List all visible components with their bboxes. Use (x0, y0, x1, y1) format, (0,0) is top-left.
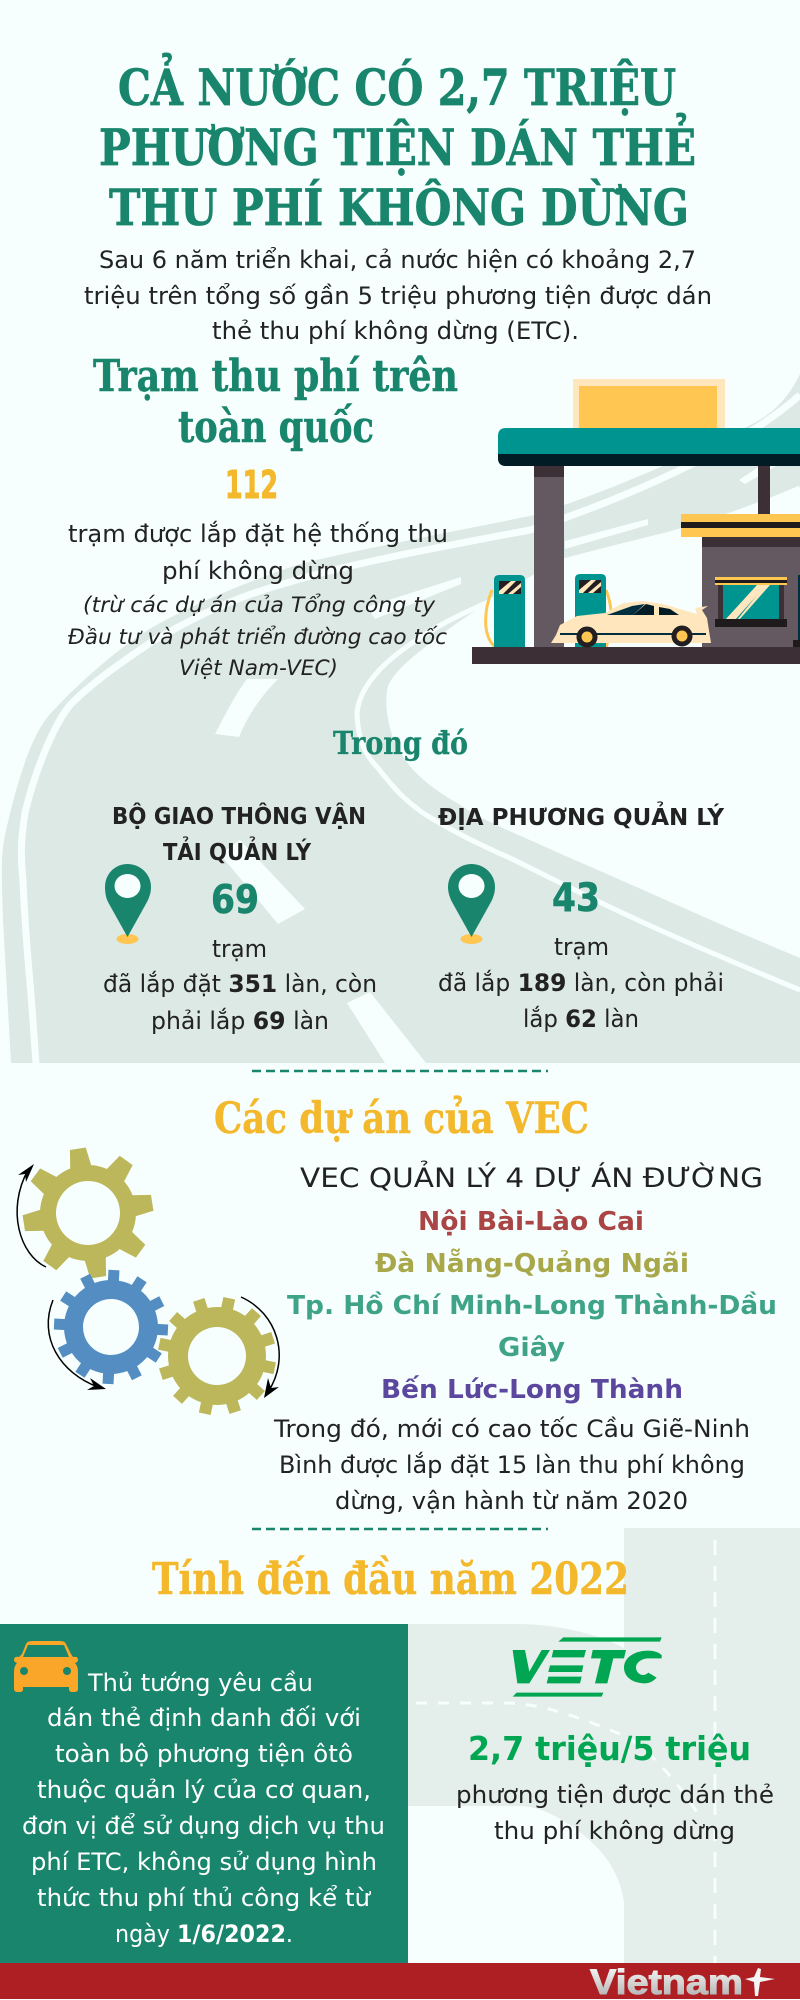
project list: Nội Bài-Lào Cai (418, 1207, 644, 1237)
heading: as of early 2022: Tính đến đầu năm 2022 (152, 1554, 629, 1605)
column heading: ĐỊA PHƯƠNG QUẢN LÝ (438, 801, 724, 831)
column: local management (438, 801, 724, 1033)
arrow: top gear (17, 1164, 46, 1267)
intro text: thẻ thu phí không dừng (ETC). (212, 317, 579, 345)
column details: trạm (554, 933, 609, 961)
illustration: toll station with car (472, 379, 800, 664)
title: THU PHÍ KHÔNG DỪNG (109, 178, 689, 237)
number: 112 stations: 112 (225, 463, 278, 507)
number: 69: 69 (211, 878, 259, 923)
title: PHƯƠNG TIỆN DÁN THẺ (99, 112, 696, 177)
panel: prime minister request (0, 1624, 408, 1963)
text: stations description: Việt Nam-VEC) (179, 656, 338, 680)
column heading: TẢI QUẢN LÝ (163, 836, 311, 866)
heading: toll stations nationwide: Trạm thu phí trên (93, 351, 458, 402)
text: stations description: (trừ các dự án của Tổng công ty (83, 593, 436, 617)
gear: lower right (147, 1286, 287, 1426)
panel text: dán thẻ định danh đối với (47, 1704, 361, 1732)
icon: car (14, 1641, 78, 1692)
project list: Đà Nẵng-Quảng Ngãi (375, 1247, 689, 1279)
panel text: toàn bộ phương tiện ôtô (55, 1740, 353, 1768)
column details: lắp 62 làn (523, 1004, 639, 1033)
panel text: đơn vị để sử dụng dịch vụ thu (22, 1812, 385, 1840)
title (99, 52, 696, 237)
road background (2, 374, 800, 1063)
panel text (22, 1669, 385, 1948)
text: Cau Gie - Ninh Binh note (273, 1415, 750, 1515)
arrow: lower right gear (241, 1297, 279, 1398)
projects heading: VEC QUẢN LÝ 4 DỰ ÁN ĐƯỜNG (300, 1160, 763, 1194)
text: stations description: Đầu tư và phát triển đường cao tốc (68, 625, 447, 649)
gear: top (14, 1139, 162, 1287)
text: stat description: phương tiện được dán thẻ (456, 1781, 774, 1809)
footer bar (0, 1963, 800, 2000)
panel text: Thủ tướng yêu cầu (87, 1669, 313, 1697)
stat: 2.7 of 5 million: 2,7 triệu/5 triệu (468, 1729, 751, 1768)
column heading: BỘ GIAO THÔNG VẬN (112, 802, 366, 830)
gear: blue (51, 1267, 171, 1387)
panel: road background lower right (408, 1528, 800, 1963)
text: stat description: thu phí không dừng (494, 1817, 735, 1845)
text: stations description: trạm được lắp đặt hệ thống thu (68, 519, 448, 548)
intro text (84, 246, 712, 345)
heading: in which: Trong đó (333, 724, 468, 762)
column details: đã lắp đặt 351 làn, còn (103, 969, 377, 998)
icon: map pin (105, 864, 151, 944)
project list: Bến Lức-Long Thành (381, 1374, 683, 1405)
column details: trạm (212, 935, 267, 963)
icon: gears with arrows (14, 1139, 287, 1426)
intro text: Sau 6 năm triển khai, cả nước hiện có khoảng 2,7 (99, 246, 696, 274)
heading: VEC projects: Các dự án của VEC (214, 1094, 589, 1144)
panel text: thuộc quản lý của cơ quan, (37, 1776, 371, 1804)
text: Cau Gie - Ninh Binh note: Bình được lắp đặt 15 làn thu phí không (279, 1450, 745, 1479)
column details: đã lắp 189 làn, còn phải (438, 968, 724, 997)
heading: toll stations nationwide: toàn quốc (178, 402, 374, 453)
project list: Tp. Hồ Chí Minh-Long Thành-Dầu (287, 1290, 777, 1321)
column heading (112, 802, 366, 866)
project list: Giây (498, 1333, 565, 1363)
heading: toll stations nationwide (93, 351, 458, 453)
text: VEC road projects (287, 1160, 777, 1405)
column: ministry of transport (103, 802, 377, 1035)
arrow: blue gear (48, 1300, 106, 1390)
number: 43: 43 (552, 876, 600, 921)
title: CẢ NƯỚC CÓ 2,7 TRIỆU (118, 52, 676, 117)
icon: map pin (448, 864, 495, 944)
text: stations description: phí không dừng (162, 557, 354, 585)
text: stations description (68, 519, 448, 680)
logo: VETC (513, 1637, 662, 1697)
column details: phải lắp 69 làn (151, 1006, 329, 1035)
text: stat description (456, 1781, 774, 1845)
column details (438, 933, 724, 1033)
intro text: triệu trên tổng số gần 5 triệu phương tiện được dán (84, 282, 712, 310)
panel text: phí ETC, không sử dụng hình (31, 1848, 377, 1876)
text: Cau Gie - Ninh Binh note: dừng, vận hành từ năm 2020 (335, 1487, 688, 1515)
panel text: thức thu phí thủ công kể từ (37, 1884, 372, 1912)
text: Cau Gie - Ninh Binh note: Trong đó, mới có cao tốc Cầu Giẽ-Ninh (273, 1415, 750, 1443)
panel text: ngày 1/6/2022. (115, 1920, 293, 1948)
column details (103, 935, 377, 1035)
project list (287, 1207, 777, 1405)
